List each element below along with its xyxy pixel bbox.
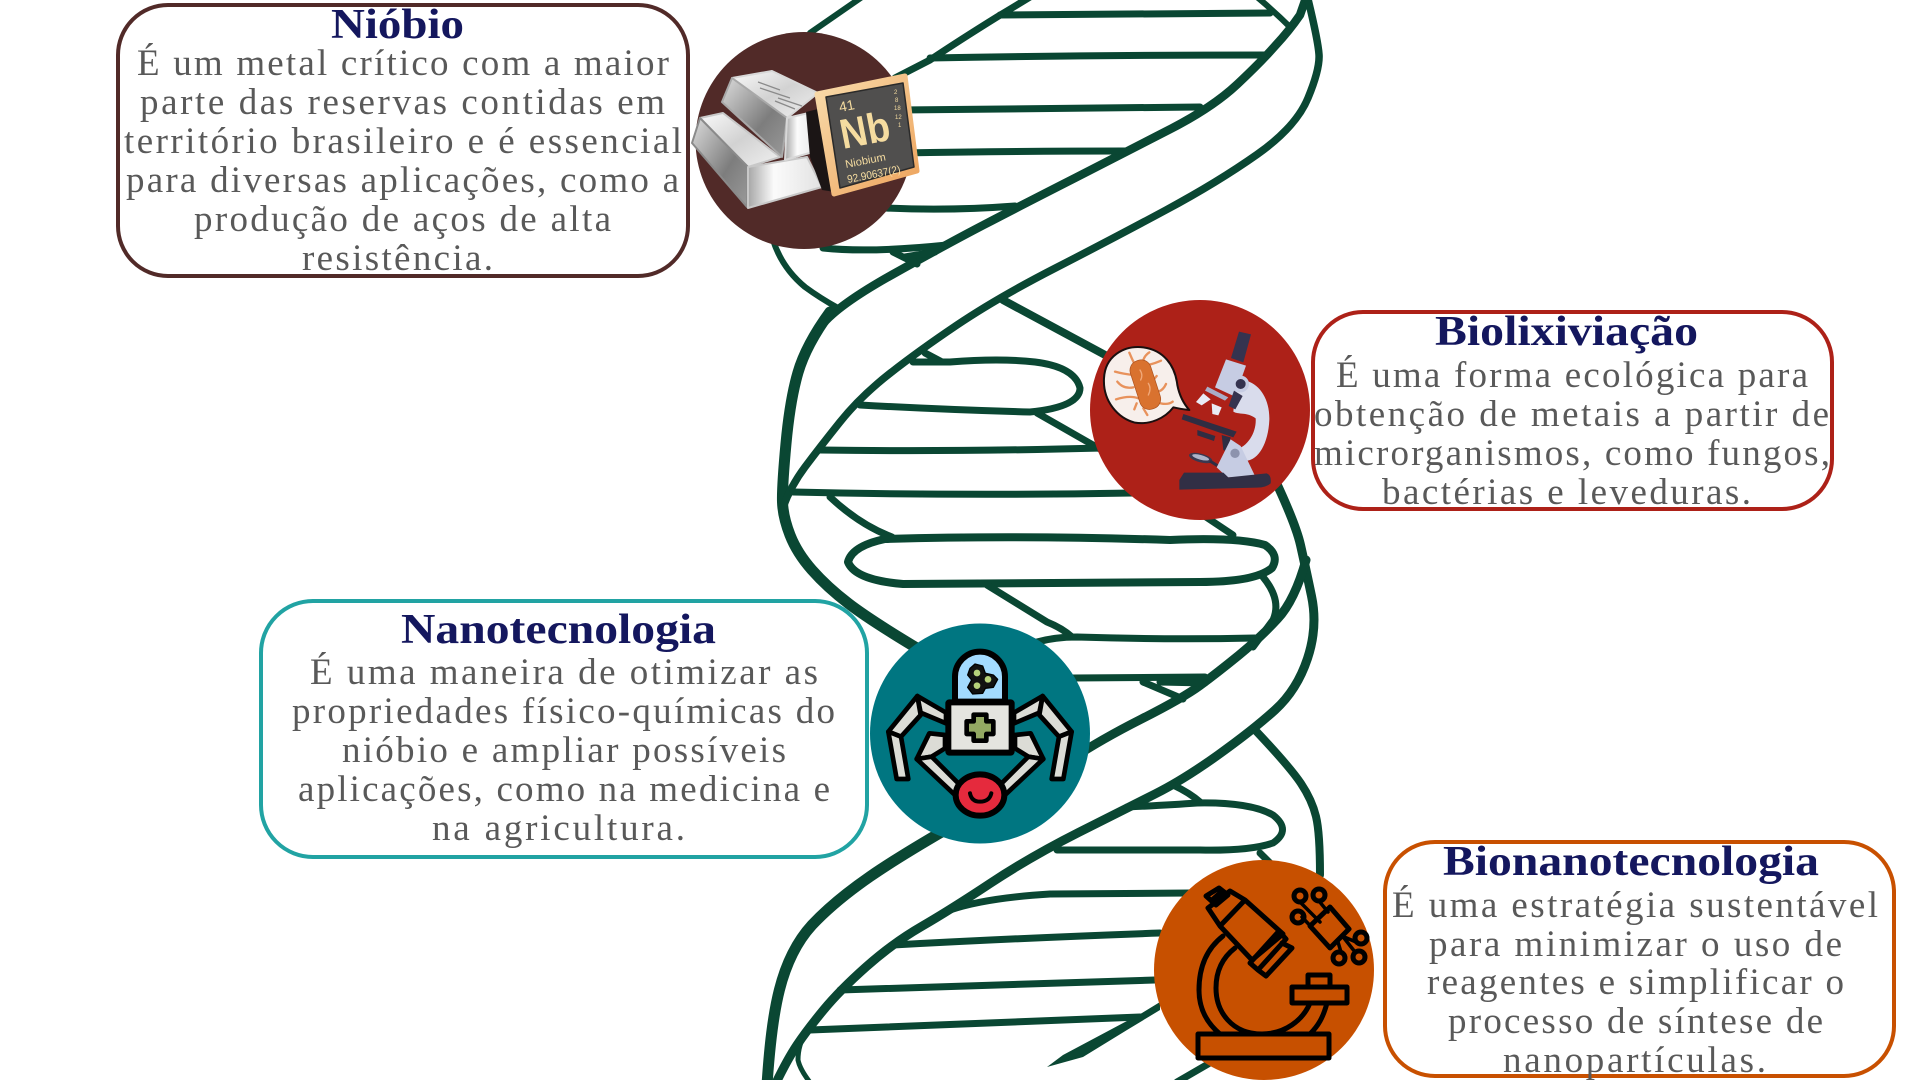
microscope tube xyxy=(1206,888,1283,960)
text block: Nióbio description xyxy=(124,42,682,279)
chart: DNA double helix xyxy=(767,0,1320,1080)
chip pins xyxy=(1300,901,1356,952)
silver bar: upper xyxy=(722,71,820,160)
heading: Bionanotecnologia: Bionanotecnologia xyxy=(1443,839,1819,885)
robot dome with molecule xyxy=(955,652,1005,702)
icon background circle xyxy=(1090,300,1310,520)
helix strand: upper outer curve xyxy=(782,0,1319,510)
text block: Nanotecnologia description: na agricultura. xyxy=(432,808,685,849)
panel: Nanotecnologia xyxy=(261,601,867,857)
robot arms xyxy=(888,696,1072,795)
icon: microscope with nanochip xyxy=(1154,860,1374,1080)
heading: Biolixiviação: Biolixiviação xyxy=(1435,309,1698,355)
panel border xyxy=(1313,312,1832,509)
helix strand: bottom short curve xyxy=(798,1032,812,1080)
microscope base xyxy=(1198,1034,1329,1058)
shadow between bars and card xyxy=(806,108,835,192)
helix strand: right outer to bottom xyxy=(775,482,1314,1080)
helix strand: inner diagonal xyxy=(1070,560,1306,760)
text block: Bionanotecnologia description xyxy=(1392,884,1878,1080)
text block: Biolixiviação description: microrganismos, como fungos, xyxy=(1314,433,1830,474)
icon: nanorobot xyxy=(870,624,1090,844)
panel border xyxy=(261,601,867,857)
element card: 12 xyxy=(895,115,902,121)
text block: Nióbio description: resistência. xyxy=(302,238,493,279)
silver bar: lower xyxy=(692,113,822,208)
helix strand: top left behind niobium xyxy=(810,0,862,33)
text block: Biolixiviação description: É uma forma ecológica para xyxy=(1336,354,1808,396)
helix strand: bottom right stub xyxy=(1177,1060,1215,1080)
text block: Biolixiviação description: bactérias e leveduras. xyxy=(1382,472,1751,513)
helix strand: lower left xyxy=(767,830,945,1080)
microscope objective xyxy=(1250,931,1292,976)
text block: Bionanotecnologia description: É uma estratégia sustentável xyxy=(1392,884,1878,926)
microscope xyxy=(1179,332,1271,490)
nano chip xyxy=(1310,907,1349,948)
text block: Nióbio description: para diversas aplicações, como a xyxy=(126,160,679,201)
speech bubble with bacterium xyxy=(1104,347,1189,423)
helix strand: top diagonal xyxy=(895,0,1030,78)
panel: Nióbio xyxy=(118,2,688,279)
icon: niobium bars and periodic table card xyxy=(692,32,917,249)
element card: 92.90637(2) xyxy=(846,164,902,186)
element card: 8 xyxy=(895,98,899,104)
icon background circle xyxy=(870,624,1090,844)
text block: Nanotecnologia description: É uma maneira de otimizar as xyxy=(310,651,818,693)
panel border xyxy=(118,5,688,276)
element card xyxy=(817,76,917,194)
element card: Nb xyxy=(836,102,894,158)
helix strand: left lower curve xyxy=(782,312,920,650)
element card: 1 xyxy=(898,123,902,129)
heading: Nanotecnologia: Nanotecnologia xyxy=(401,607,716,653)
icon background circle xyxy=(1154,860,1374,1080)
panel border xyxy=(1385,842,1894,1076)
text block: Nióbio description: É um metal crítico com a maior xyxy=(137,42,669,84)
text block: Biolixiviação description: obtenção de metais a partir de xyxy=(1314,394,1829,435)
heading: Nióbio: Nióbio xyxy=(331,2,464,48)
robot body with cross xyxy=(948,702,1012,753)
red blood cell xyxy=(956,774,1004,816)
leaf-shaped strand xyxy=(1047,1002,1160,1067)
helix strand: curve below niobium xyxy=(773,240,838,308)
helix strand: upper main diagonal to left side xyxy=(822,0,1307,325)
panel: Bionanotecnologia xyxy=(1385,839,1894,1080)
microscope stage xyxy=(1292,975,1347,1003)
microscope arm xyxy=(1199,936,1327,1034)
panel: Biolixiviação xyxy=(1313,309,1832,513)
element card: 2 xyxy=(894,90,898,96)
text block: Nióbio description: parte das reservas contidas em xyxy=(140,82,665,123)
element card: 41 xyxy=(838,96,856,115)
text block: Bionanotecnologia description: para minimizar o uso de xyxy=(1429,924,1842,965)
text block: Bionanotecnologia description: reagentes e simplificar o xyxy=(1427,962,1844,1003)
text block: Bionanotecnologia description: nanopartículas. xyxy=(1503,1040,1766,1080)
text block: Nanotecnologia description: aplicações, como na medicina e xyxy=(298,769,830,810)
text block: Nanotecnologia description: propriedades físico-químicas do xyxy=(292,691,835,732)
base pair rungs xyxy=(793,13,1282,1030)
helix strand: top right short diagonal xyxy=(1257,0,1291,28)
icon: bacterium and microscope xyxy=(1090,300,1310,520)
element card: Niobium xyxy=(844,151,887,171)
text block: Nanotecnologia description: nióbio e ampliar possíveis xyxy=(342,730,786,771)
text block: Bionanotecnologia description: processo de síntese de xyxy=(1448,1001,1823,1042)
helix strand: lower right xyxy=(1256,731,1320,875)
element card: 18 xyxy=(894,106,901,112)
icon background circle xyxy=(696,32,912,249)
text block: Nanotecnologia description xyxy=(292,651,835,849)
text block: Biolixiviação description xyxy=(1314,354,1830,513)
text block: Nióbio description: território brasileiro e é essencial xyxy=(124,121,682,162)
text block: Nióbio description: produção de aços de alta xyxy=(194,199,611,240)
